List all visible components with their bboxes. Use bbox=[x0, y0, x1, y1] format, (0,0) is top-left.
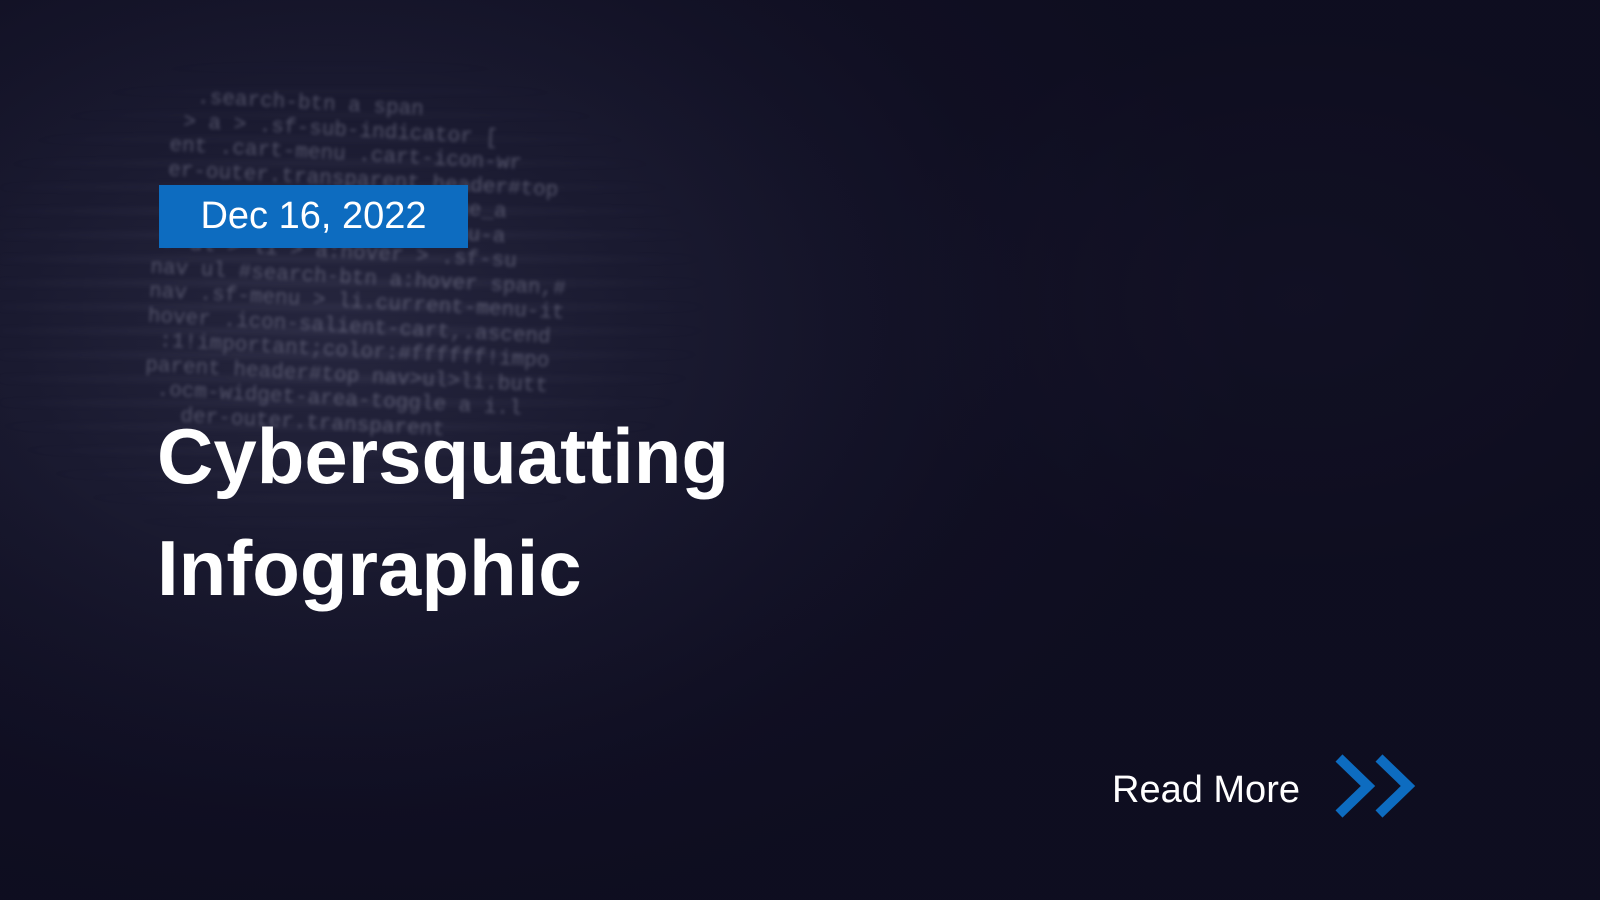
title: Infographic bbox=[157, 524, 582, 612]
icon: double chevron bbox=[1336, 754, 1416, 818]
background code text: .search-btn a span > a > .sf-sub-indicator [ ent .cart-menu .cart-icon-wr er-outer.transparent header#top t_page_a t-menu-a > ul > li > a:hover > .sf-su nav ul #search-btn a:hover span,# nav .sf-menu > li.current-menu-it hover .icon-salient-cart,.ascend :1!important;color:#ffffff!impo parent header#top nav>ul>li.butt .ocm-widget-area-toggle a i.l der-outer.transparent bbox=[142, 87, 566, 442]
date badge: Dec 16, 2022 bbox=[200, 195, 427, 237]
title: Cybersquatting bbox=[157, 412, 729, 500]
date badge bbox=[159, 185, 468, 248]
title bbox=[157, 412, 729, 612]
read more text: Read More bbox=[1112, 769, 1300, 811]
